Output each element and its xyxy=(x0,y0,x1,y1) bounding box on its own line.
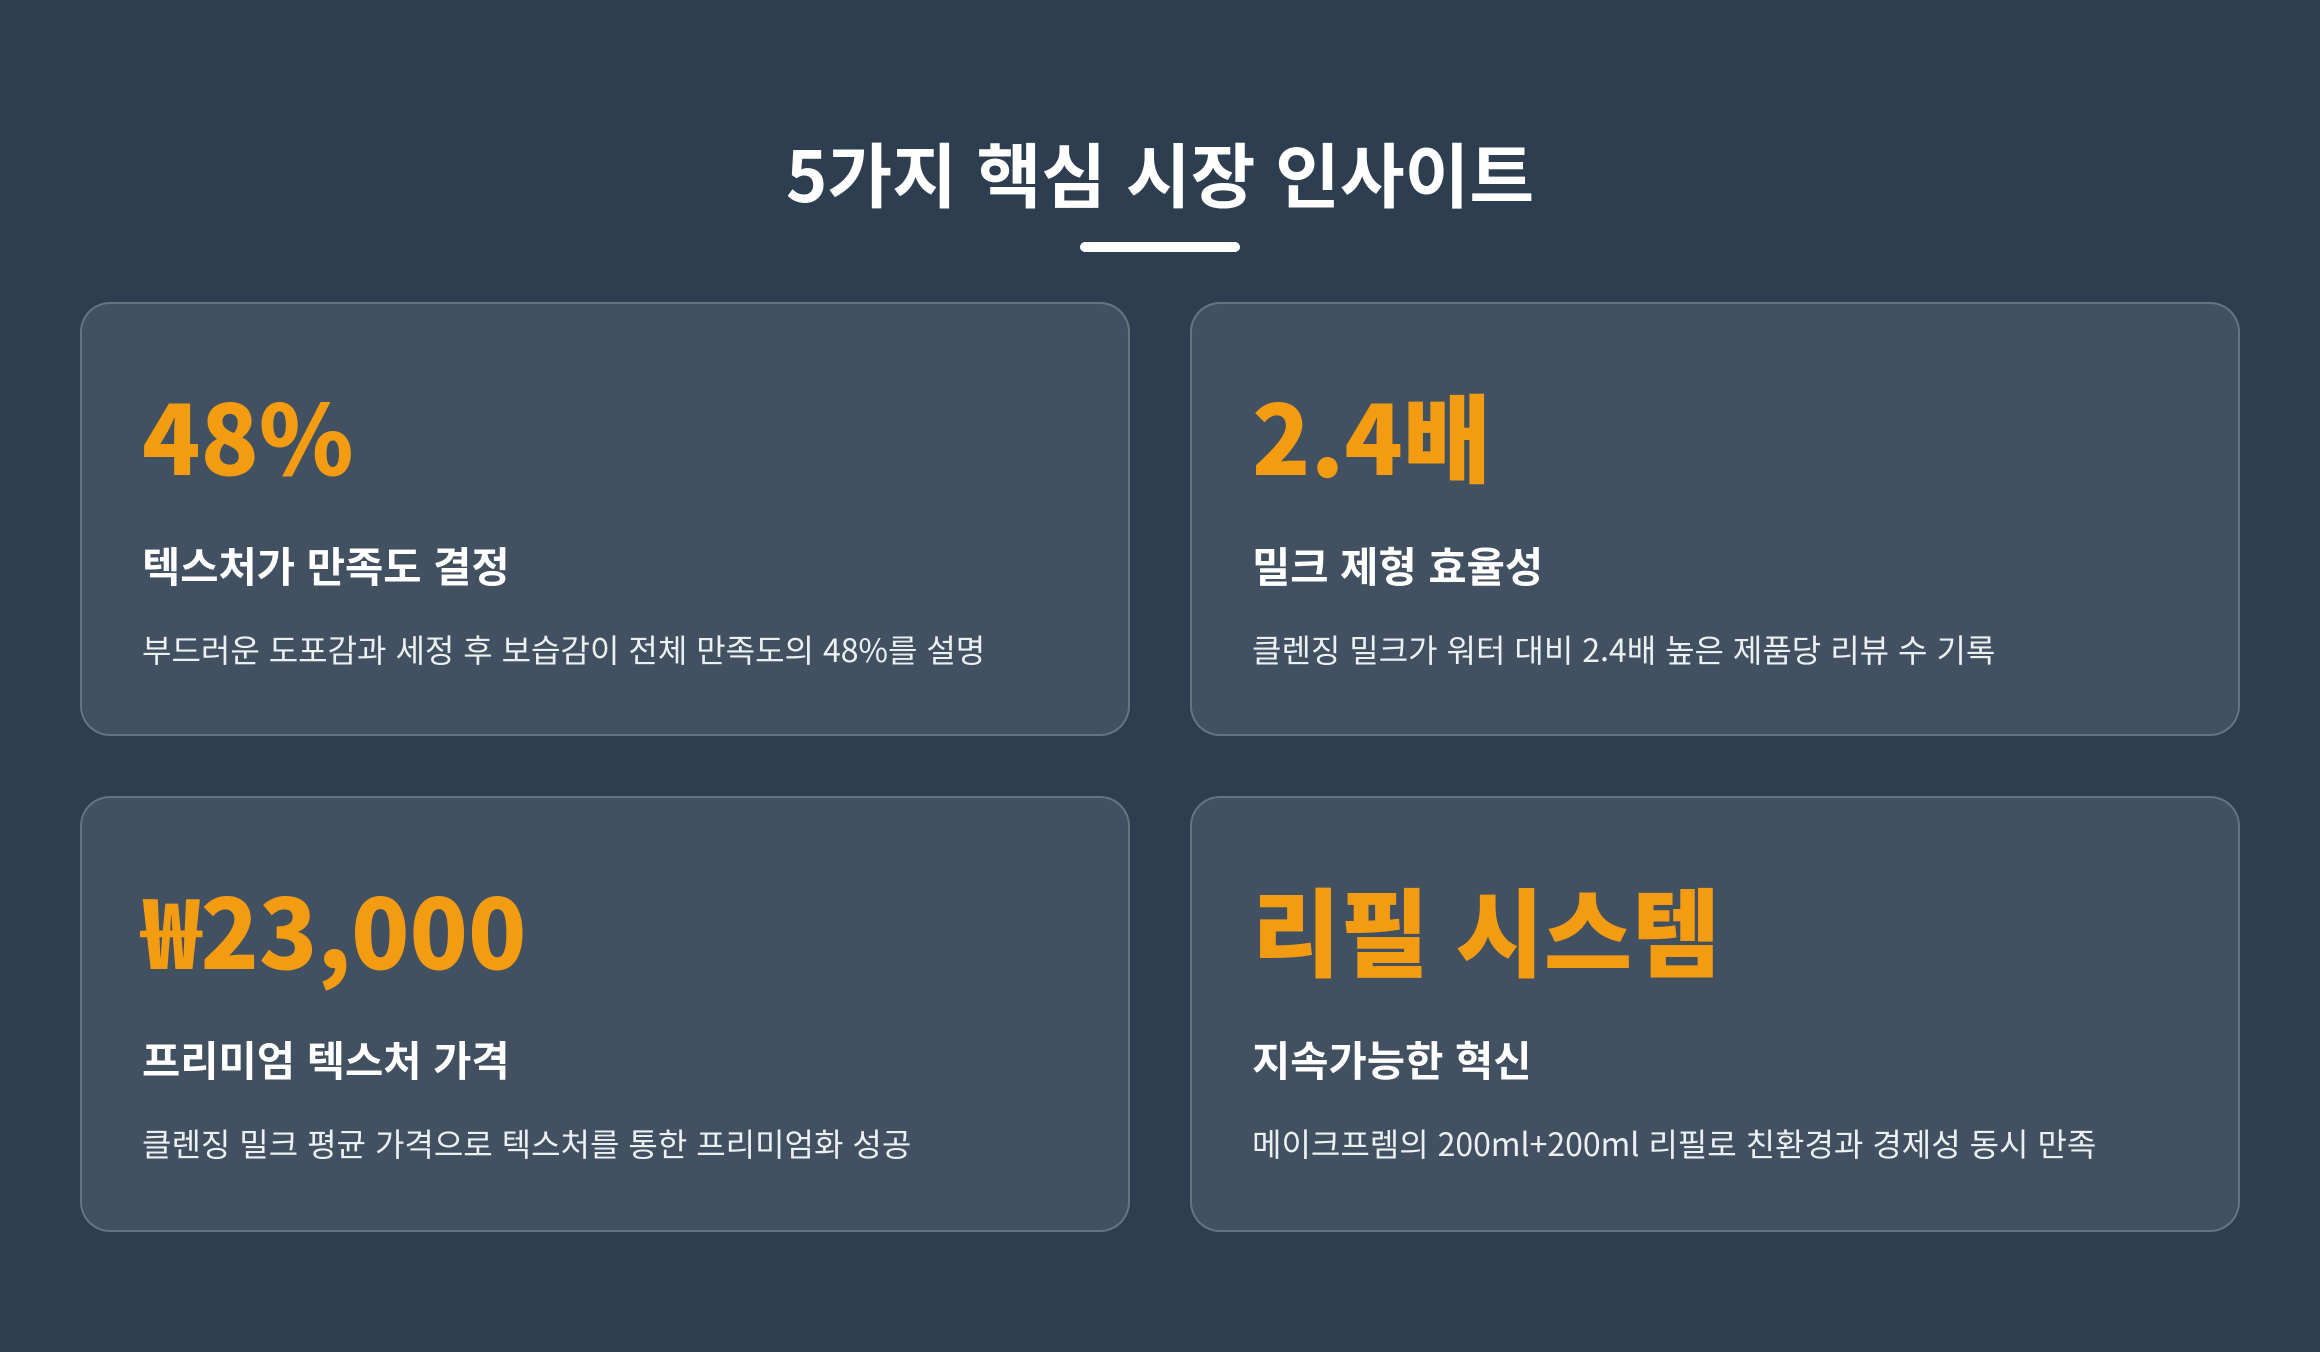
card heading: 텍스처가 만족도 결정 xyxy=(142,534,510,594)
stat: 2.4배: 2.4배 xyxy=(1252,364,1491,503)
title: 5가지 핵심 시장 인사이트 xyxy=(786,121,1534,223)
card heading: 지속가능한 혁신 xyxy=(1252,1028,1532,1088)
stat: 48%: 48% xyxy=(142,364,354,503)
card heading: 프리미엄 텍스처 가격 xyxy=(142,1028,510,1088)
panel: premium price xyxy=(80,796,1130,1232)
card description: 클렌징 밀크 평균 가격으로 텍스처를 통한 프리미엄화 성공 xyxy=(142,1120,911,1166)
panel: texture satisfaction xyxy=(80,302,1130,736)
card description: 부드러운 도포감과 세정 후 보습감이 전체 만족도의 48%를 설명 xyxy=(142,626,985,672)
title underline xyxy=(1080,242,1240,252)
stat: ₩23,000: ₩23,000 xyxy=(142,858,526,997)
panel: milk efficiency xyxy=(1190,302,2240,736)
card heading: 밀크 제형 효율성 xyxy=(1252,534,1543,594)
card description: 클렌징 밀크가 워터 대비 2.4배 높은 제품당 리뷰 수 기록 xyxy=(1252,626,1995,672)
card description: 메이크프렘의 200ml+200ml 리필로 친환경과 경제성 동시 만족 xyxy=(1252,1120,2096,1166)
panel: refill system xyxy=(1190,796,2240,1232)
stat: 리필 시스템: 리필 시스템 xyxy=(1252,858,1720,997)
